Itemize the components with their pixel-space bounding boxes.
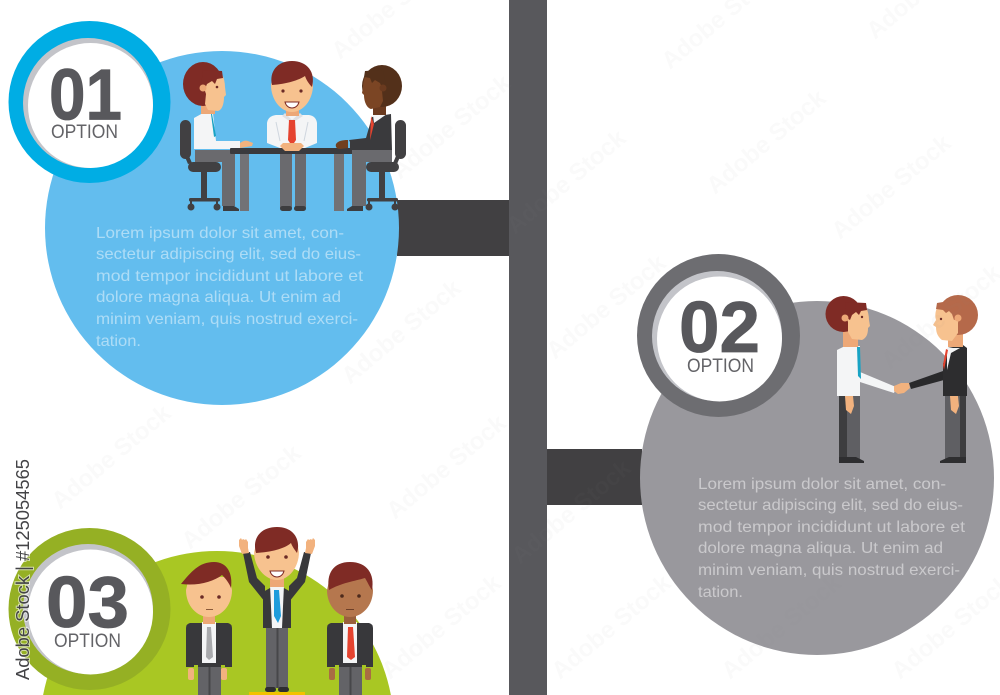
clasped hands bbox=[894, 383, 910, 394]
illustration: team with winner bbox=[181, 527, 373, 695]
watermark text: Adobe Stock bbox=[387, 69, 517, 185]
badge 03: OPTION bbox=[54, 631, 121, 652]
table bbox=[230, 148, 355, 211]
watermark text: Adobe Stock bbox=[507, 454, 637, 570]
watermark text: Adobe Stock bbox=[827, 129, 957, 245]
watermark text: Adobe Stock bbox=[377, 569, 507, 685]
blue panel circle bbox=[45, 51, 399, 405]
watermark text: Adobe Stock bbox=[177, 439, 307, 555]
right man bbox=[327, 562, 373, 695]
grey panel circle bbox=[640, 301, 994, 655]
body text 2: sectetur adipiscing elit, sed do eius- bbox=[698, 497, 963, 514]
watermark text: Adobe Stock bbox=[542, 249, 672, 365]
body text 2: dolore magna aliqua. Ut enim ad bbox=[698, 540, 943, 557]
badge 01 bbox=[8, 21, 170, 183]
connector: option 2 to spine bbox=[547, 449, 642, 505]
body text 2: Lorem ipsum dolor sit amet, con- bbox=[698, 476, 946, 493]
left chair bbox=[180, 120, 221, 210]
badge 02: OPTION bbox=[687, 356, 754, 377]
badge 02 bbox=[637, 254, 800, 417]
body text 2: tation. bbox=[698, 584, 743, 601]
body text 1 bbox=[96, 225, 364, 350]
vertical stock id label: Adobe Stock | #125054565 bbox=[13, 459, 33, 680]
middle man arms raised bbox=[239, 527, 315, 695]
watermark text: Adobe Stock bbox=[547, 569, 677, 685]
right chair bbox=[366, 120, 406, 210]
illustration: meeting at table bbox=[180, 61, 406, 211]
watermark text: Adobe Stock bbox=[702, 84, 832, 200]
body text 1: Lorem ipsum dolor sit amet, con- bbox=[96, 225, 344, 242]
watermark text: Adobe Stock bbox=[337, 274, 467, 390]
badge 03: 03 bbox=[46, 563, 129, 643]
badge 01: 01 bbox=[49, 56, 122, 136]
panel: option 1 bbox=[8, 21, 406, 405]
watermark text: Adobe Stock bbox=[382, 409, 512, 525]
body text 2: minim veniam, quis nostrud exerci- bbox=[698, 562, 960, 579]
illustration: handshake bbox=[826, 295, 978, 463]
body text 1: minim veniam, quis nostrud exerci- bbox=[96, 311, 358, 328]
body text 1: dolore magna aliqua. Ut enim ad bbox=[96, 289, 341, 306]
left man bbox=[181, 562, 232, 695]
central spine bbox=[509, 0, 547, 695]
body text 2 bbox=[698, 476, 966, 601]
badge 03 bbox=[8, 528, 170, 690]
watermark text: Adobe Stock bbox=[47, 399, 177, 515]
watermark text: Adobe Stock bbox=[502, 124, 632, 240]
connector: option 1 to spine bbox=[397, 200, 509, 256]
body text 1: tation. bbox=[96, 333, 141, 350]
panel: option 3 bbox=[8, 527, 391, 695]
badge 01: OPTION bbox=[51, 122, 118, 143]
watermark text: Adobe Stock bbox=[717, 569, 847, 685]
body text 1: sectetur adipiscing elit, sed do eius- bbox=[96, 246, 361, 263]
badge 02: 02 bbox=[679, 288, 760, 368]
panel: option 2 bbox=[637, 254, 994, 655]
right man bbox=[909, 295, 978, 463]
body text 2: mod tempor incididunt ut labore et bbox=[698, 519, 966, 536]
left man bbox=[826, 296, 896, 463]
body text 1: mod tempor incididunt ut labore et bbox=[96, 268, 364, 285]
left man seated bbox=[183, 62, 253, 211]
middle man facing front bbox=[267, 61, 317, 211]
right man seated bbox=[336, 65, 402, 211]
green panel circle bbox=[43, 551, 391, 695]
